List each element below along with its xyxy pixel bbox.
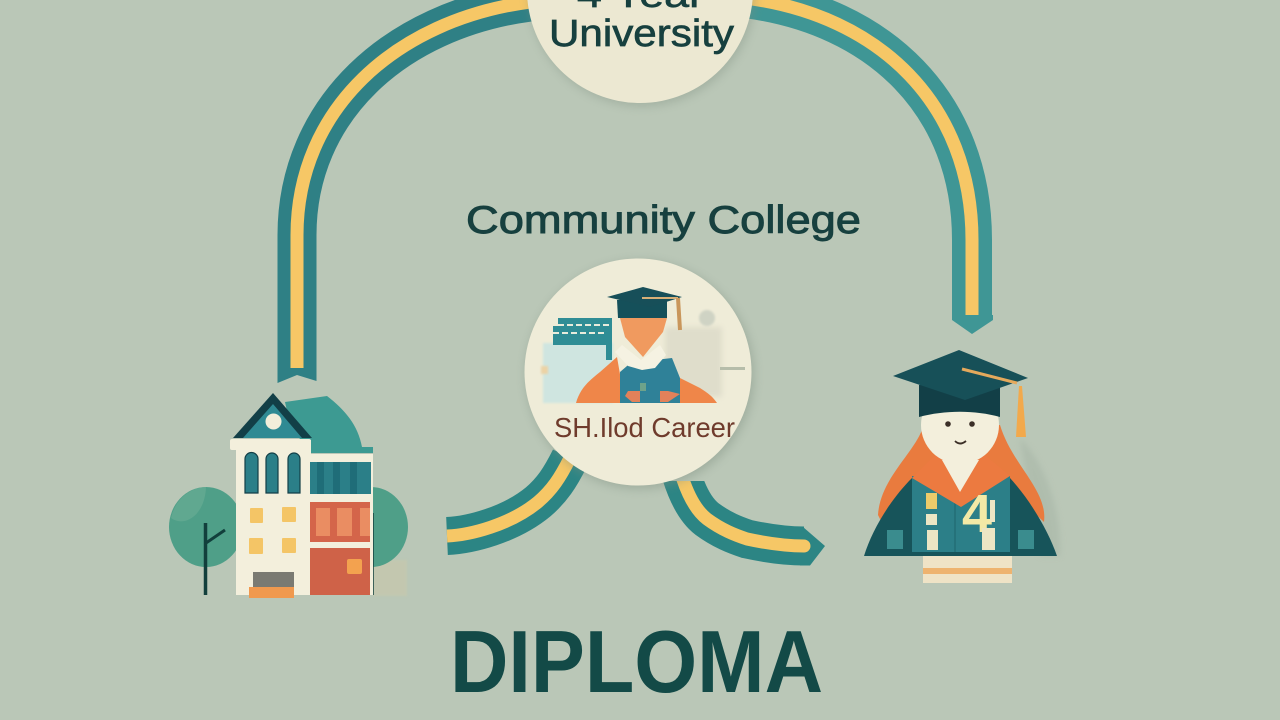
infographic canvas (169, 0, 1058, 693)
right wing (310, 454, 373, 595)
icon: right tree (334, 487, 408, 595)
icon: left tree (169, 487, 243, 595)
soft shadow (1020, 440, 1060, 556)
label: SH.Ilod Career: SH.Ilod Career (554, 412, 735, 443)
arrow: left arch to university (278, 2, 530, 383)
icon: graduate figure (576, 287, 717, 403)
icon: school building (169, 393, 408, 598)
roof (285, 396, 373, 453)
ground shadow (373, 560, 407, 596)
collar (912, 455, 1010, 507)
node: 4 Year University (527, 0, 755, 106)
cap (893, 350, 1028, 437)
door (253, 572, 294, 590)
label: University: University (549, 13, 734, 55)
arrow: right lower ribbon (680, 470, 825, 566)
face (921, 386, 999, 464)
tower windows (245, 452, 300, 493)
node: skilled career circle (524, 258, 754, 489)
arrow: right arch to graduate (745, 0, 993, 334)
books (923, 556, 1012, 583)
cream tower (236, 440, 311, 595)
gown (864, 478, 1057, 556)
arrow: left lower ribbon (447, 458, 570, 536)
icon: graduate with cap (864, 350, 1060, 583)
title: DIPLOMA: DIPLOMA (450, 612, 823, 711)
heading: Community College: Community College (466, 199, 861, 242)
gown ornaments (926, 493, 995, 550)
hair (878, 425, 1044, 525)
icon: campus backdrop (541, 310, 745, 403)
gown number: 4 (962, 484, 992, 544)
